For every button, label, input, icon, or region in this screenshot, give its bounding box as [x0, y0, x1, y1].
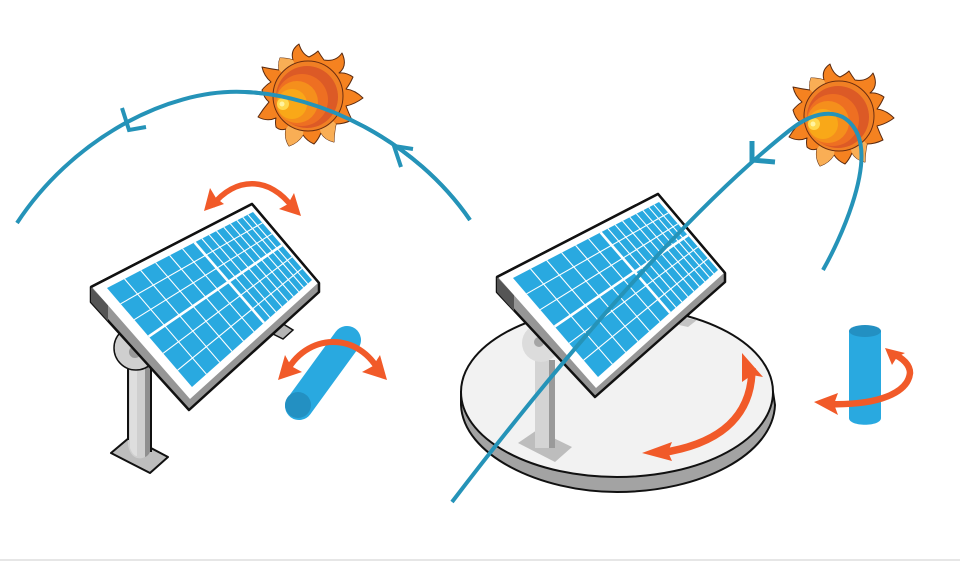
dual-axis tracker [497, 194, 725, 462]
single-axis tracker [91, 204, 319, 473]
turntable disc [461, 307, 775, 492]
arrowhead: left arc west [122, 108, 146, 130]
icon: tilted axis cylinder [285, 340, 347, 418]
bottom rule [0, 559, 960, 561]
post column [535, 360, 555, 448]
post column [128, 365, 151, 458]
arrow: panel tilt [204, 184, 301, 216]
post base [111, 437, 168, 473]
icon: right sun [789, 64, 894, 166]
solar panel frame [91, 204, 319, 410]
rear bracket [679, 317, 697, 327]
icon: left sun [258, 44, 363, 146]
rear bracket [271, 322, 293, 339]
arrow: rotation around tilted axis [278, 342, 387, 380]
right sun path [452, 114, 861, 502]
solar cells [513, 202, 718, 377]
arrow: rotation around vertical axis [814, 348, 910, 415]
solar cells [107, 212, 312, 387]
arrow: turntable rotation [642, 353, 763, 461]
hinge disc [522, 324, 560, 362]
hinge disc [114, 326, 158, 370]
arrowhead: left arc east [394, 146, 413, 167]
arrowhead: right path [752, 141, 775, 162]
icon: vertical axis cylinder [849, 325, 881, 425]
left sun path arc [17, 92, 470, 223]
left sun path over sun [245, 92, 470, 220]
solar panel frame [497, 194, 725, 397]
post base [518, 430, 572, 462]
